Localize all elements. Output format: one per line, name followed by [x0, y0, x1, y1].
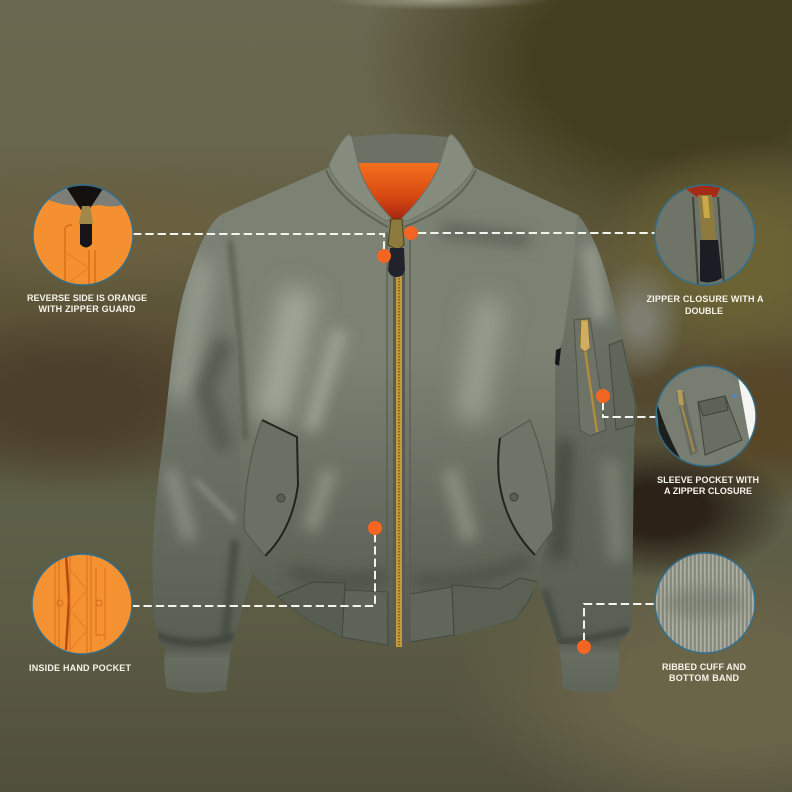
caption: DOUBLE — [685, 306, 723, 316]
collar seam — [326, 170, 476, 227]
left cuff — [164, 648, 231, 693]
sleeve slit — [555, 348, 561, 366]
left sleeve — [152, 214, 252, 648]
detail circle: sleeve pocket — [655, 365, 757, 467]
callout: zipper closure — [646, 185, 764, 316]
caption — [657, 475, 759, 496]
hem band right — [452, 578, 538, 637]
caption: INSIDE HAND POCKET — [29, 663, 132, 673]
left hand pocket — [244, 420, 298, 556]
left pocket snap — [277, 494, 285, 502]
right sleeve — [537, 215, 637, 644]
detail circle: orange lining — [30, 180, 140, 285]
detail circle: zipper — [655, 185, 755, 285]
caption — [27, 293, 147, 314]
caption: ZIPPER CLOSURE WITH A — [646, 294, 764, 304]
hem panel right — [410, 587, 454, 642]
zipper head and pull — [388, 219, 405, 277]
caption — [646, 294, 764, 316]
callout: orange reverse side — [27, 180, 147, 314]
hem panel left — [342, 590, 388, 645]
markers — [368, 226, 610, 654]
caption: SLEEVE POCKET WITH — [657, 475, 759, 485]
sleeve flap pocket — [609, 340, 636, 430]
callout lines — [133, 233, 656, 641]
placket seams — [387, 232, 410, 645]
caption: RIBBED CUFF AND — [662, 662, 746, 672]
right hand pocket — [498, 420, 553, 555]
caption: WITH ZIPPER GUARD — [38, 304, 136, 314]
caption — [662, 662, 746, 683]
right pocket snap — [510, 493, 518, 501]
hem band left — [277, 582, 345, 638]
collar front — [329, 134, 474, 221]
caption: REVERSE SIDE IS ORANGE — [27, 293, 147, 303]
caption: BOTTOM BAND — [669, 673, 740, 683]
orange lining — [358, 163, 440, 222]
collar back — [352, 134, 448, 168]
right cuff — [558, 642, 620, 693]
detail circle: ribbing — [655, 553, 755, 653]
caption: A ZIPPER CLOSURE — [664, 486, 752, 496]
body — [215, 160, 585, 650]
sleeve zipper — [580, 320, 597, 432]
jacket — [145, 134, 640, 693]
front zipper — [393, 272, 405, 647]
callout: sleeve pocket — [650, 360, 759, 496]
detail circle: orange pocket — [32, 554, 132, 654]
callout: inside hand pocket — [29, 554, 132, 673]
callout: ribbed cuff — [655, 553, 755, 683]
sleeve zip panel — [574, 318, 606, 436]
